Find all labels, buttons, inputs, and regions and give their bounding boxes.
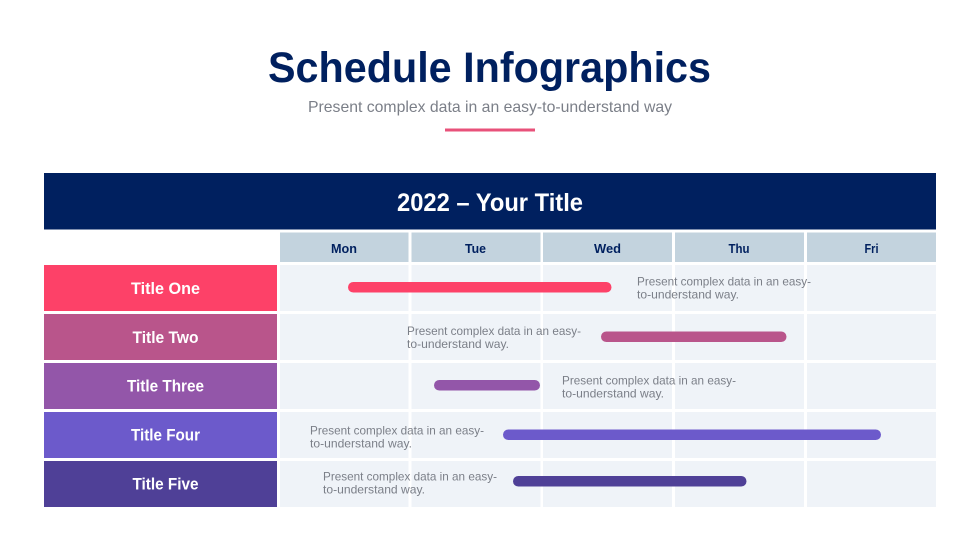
row: Title Two: Title Two (132, 328, 198, 347)
row: Title One: Present complex data in an easy- (637, 274, 811, 288)
title: Schedule Infographics (268, 44, 711, 92)
row: Title Three: to-understand way. (562, 386, 664, 400)
subtitle: Present complex data in an easy-to-understand way (308, 99, 672, 116)
row: Title Two (44, 314, 786, 360)
row: Title Three (44, 363, 736, 409)
row: Title Two: Present complex data in an easy- (407, 324, 581, 338)
row: Title Four: Title Four (131, 426, 200, 444)
weekday header row (280, 232, 936, 262)
weekday header row: Wed (594, 241, 621, 256)
row: Title One: to-understand way. (637, 288, 739, 302)
row: Title Four (44, 412, 881, 458)
weekday header row: Fri (864, 241, 878, 256)
row: Title Five: Present complex data in an easy- (323, 470, 497, 484)
row: Title One: Title One (131, 279, 200, 298)
weekday header row: Mon (331, 241, 357, 256)
schedule grid cells (280, 265, 936, 507)
accent underline (445, 128, 535, 132)
row: Title One (44, 265, 811, 311)
row: Title Five: Title Five (132, 474, 198, 494)
schedule table header: 2022 – Your Title (397, 189, 583, 217)
row: Title Two: to-understand way. (407, 337, 509, 351)
weekday header row: Tue (465, 241, 486, 256)
row: Title Five (44, 461, 746, 507)
weekday header row: Thu (728, 241, 750, 256)
row: Title Five: to-understand way. (323, 482, 425, 496)
row: Title Three: Title Three (127, 376, 204, 396)
row: Title Four: Present complex data in an easy- (310, 424, 484, 438)
schedule table header (44, 173, 936, 230)
row: Title Four: to-understand way. (310, 436, 412, 450)
row: Title Three: Present complex data in an easy- (562, 374, 736, 388)
